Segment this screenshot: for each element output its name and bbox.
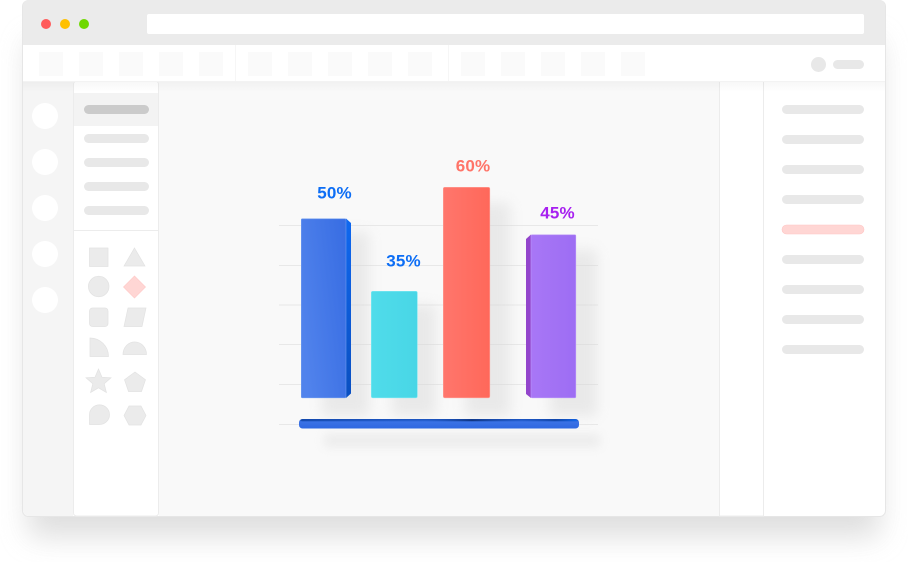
title bar [23, 0, 885, 45]
right properties panel [782, 105, 864, 354]
label: 50%: 50% [317, 184, 352, 203]
bar shadows [322, 203, 597, 416]
label: 45%: 45% [540, 204, 575, 223]
bar chart [279, 157, 600, 447]
label: 35%: 35% [386, 252, 421, 271]
bar: 50% [301, 218, 351, 398]
right narrow panel [720, 81, 764, 516]
toolbar [23, 45, 885, 82]
toolbar shadow [23, 82, 885, 92]
maximise button [79, 19, 89, 29]
bar: 60% [443, 187, 490, 398]
highlighted diamond [124, 276, 146, 298]
bar: 45% [526, 234, 576, 398]
user avatar [811, 57, 826, 72]
shape palette [86, 248, 146, 425]
bar: 35% [371, 291, 417, 398]
chart base [299, 419, 579, 428]
user name [833, 60, 864, 69]
address bar [147, 14, 864, 34]
highlighted row [782, 225, 864, 234]
left menu panel [74, 81, 158, 516]
label: 60%: 60% [456, 157, 490, 176]
base shadow [324, 434, 600, 447]
selected menu row [74, 93, 158, 126]
grid lines [279, 225, 598, 425]
canvas area [159, 81, 719, 516]
left icon rail [23, 81, 73, 516]
close button [41, 19, 51, 29]
minimise button [60, 19, 70, 29]
